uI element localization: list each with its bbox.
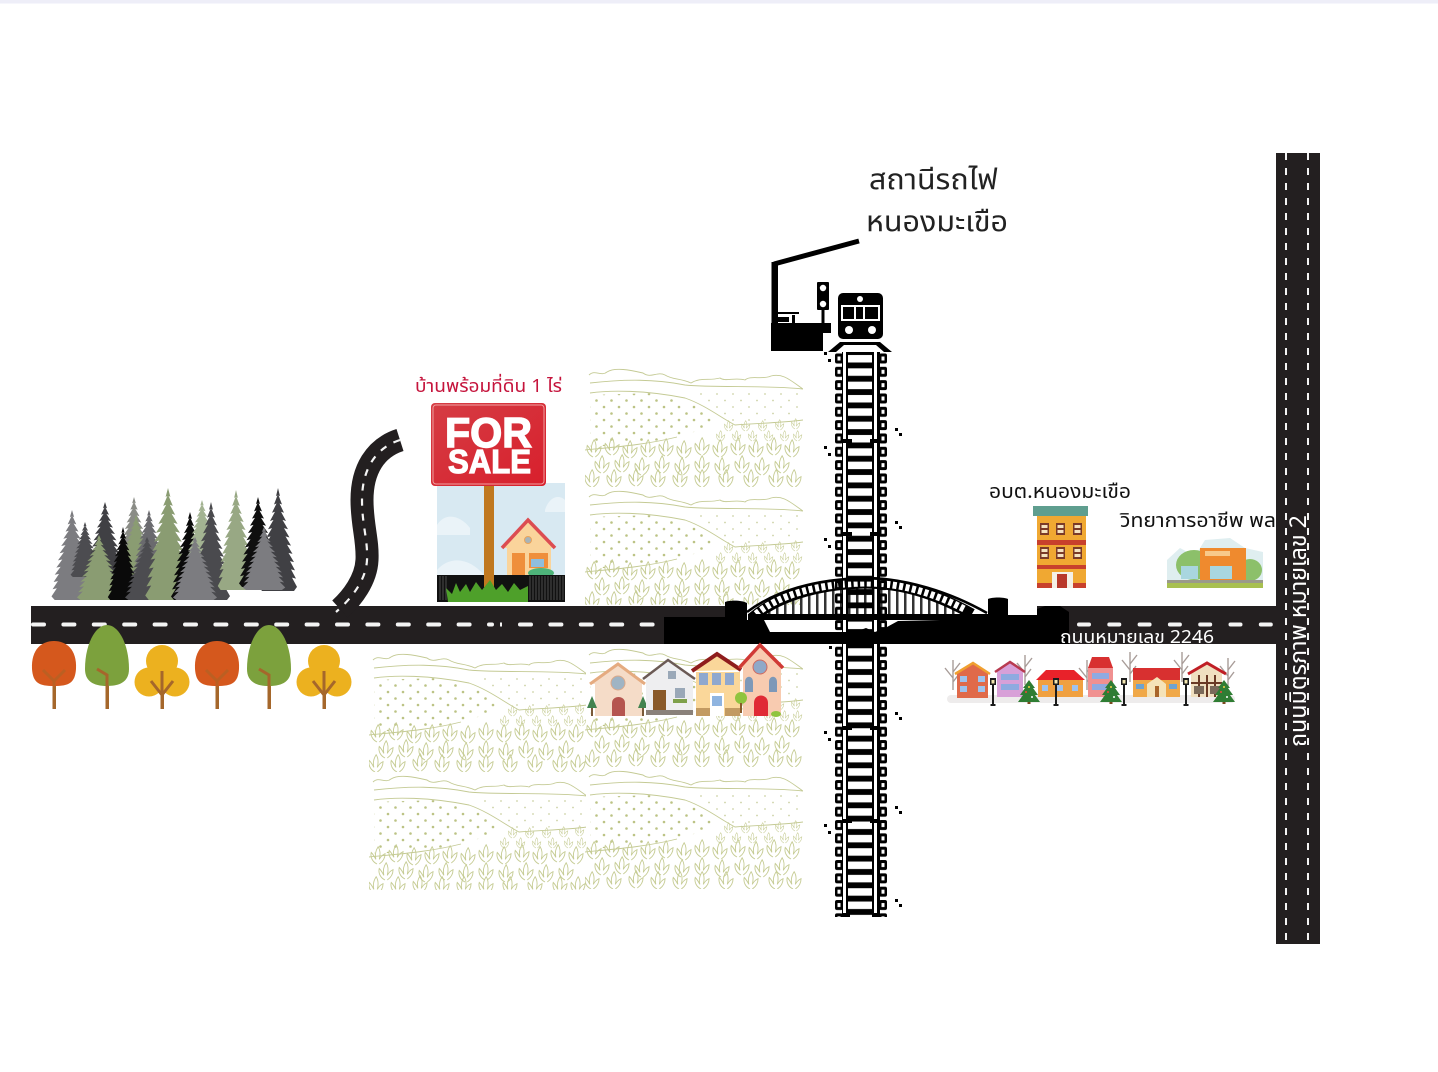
for sale sign: SALE [448, 443, 531, 480]
bare trees [945, 652, 1235, 690]
grass [446, 580, 528, 602]
house f [1188, 663, 1226, 697]
arch upper chord [747, 578, 987, 613]
railway track [824, 352, 902, 917]
house b [995, 662, 1025, 697]
house d [1088, 657, 1113, 697]
small house [502, 520, 555, 578]
house 1 [587, 664, 648, 716]
house a [955, 663, 990, 698]
clouds [437, 497, 565, 575]
street lamps [990, 678, 1189, 706]
for sale sign: FOR [445, 409, 532, 456]
friendship highway vertical road [1276, 153, 1320, 944]
train front [838, 293, 883, 339]
field: upper farmland [585, 365, 803, 605]
christmas trees [1018, 680, 1235, 704]
curved side road [336, 440, 400, 612]
winter village houses [945, 652, 1235, 706]
platform wedge [828, 342, 892, 352]
arch lattice gaps [756, 583, 966, 614]
for sale sign [431, 403, 546, 486]
ballast dots [824, 352, 902, 907]
fence [437, 575, 565, 602]
house 3 [692, 654, 741, 716]
label: vocational college: วิทยาการอาชีพ พล [1119, 506, 1276, 536]
sky backdrop [437, 483, 565, 583]
pine forest [51, 488, 297, 600]
college building [1167, 538, 1263, 588]
track cross ties [842, 441, 880, 915]
railway station [771, 241, 892, 352]
signal light [817, 282, 829, 324]
arch band [752, 583, 972, 618]
field: lower right farmland [585, 645, 803, 890]
main road number 2246 [31, 606, 1277, 644]
house e [1133, 668, 1180, 697]
roadside trees [32, 625, 352, 709]
ground shadow [947, 695, 1235, 703]
bridge lower silhouette and towers [664, 598, 1069, 644]
bridge upper structure [747, 578, 1037, 632]
signpost [484, 484, 494, 587]
deck [748, 614, 988, 620]
hangers [752, 586, 975, 616]
white bridge backdrop [747, 606, 1037, 632]
bench [778, 312, 799, 323]
label: house with land: บ้านพร้อมที่ดิน 1 ไร่ [415, 373, 562, 401]
house 2 [643, 660, 695, 715]
top edge strip [0, 0, 1438, 4]
field: lower left farmland [369, 650, 586, 890]
small houses by the field [587, 645, 783, 717]
fence gaps [440, 576, 563, 600]
house for sale image [437, 483, 565, 602]
station name label [866, 159, 1008, 245]
label: subdistrict office: อบต.หนองมะเขือ [989, 477, 1131, 507]
station name label: หนองมะเขือ [866, 201, 1008, 245]
label: friendship highway: ถนนมิตรภาพ หมายเลข 2 [1283, 515, 1317, 747]
label: road 2246: ถนนหมายเลข 2246 [1060, 625, 1214, 652]
station name label: สถานีรถไฟ [869, 159, 998, 203]
house 4 [735, 645, 783, 717]
house c [1036, 670, 1085, 697]
office building [1033, 506, 1088, 588]
